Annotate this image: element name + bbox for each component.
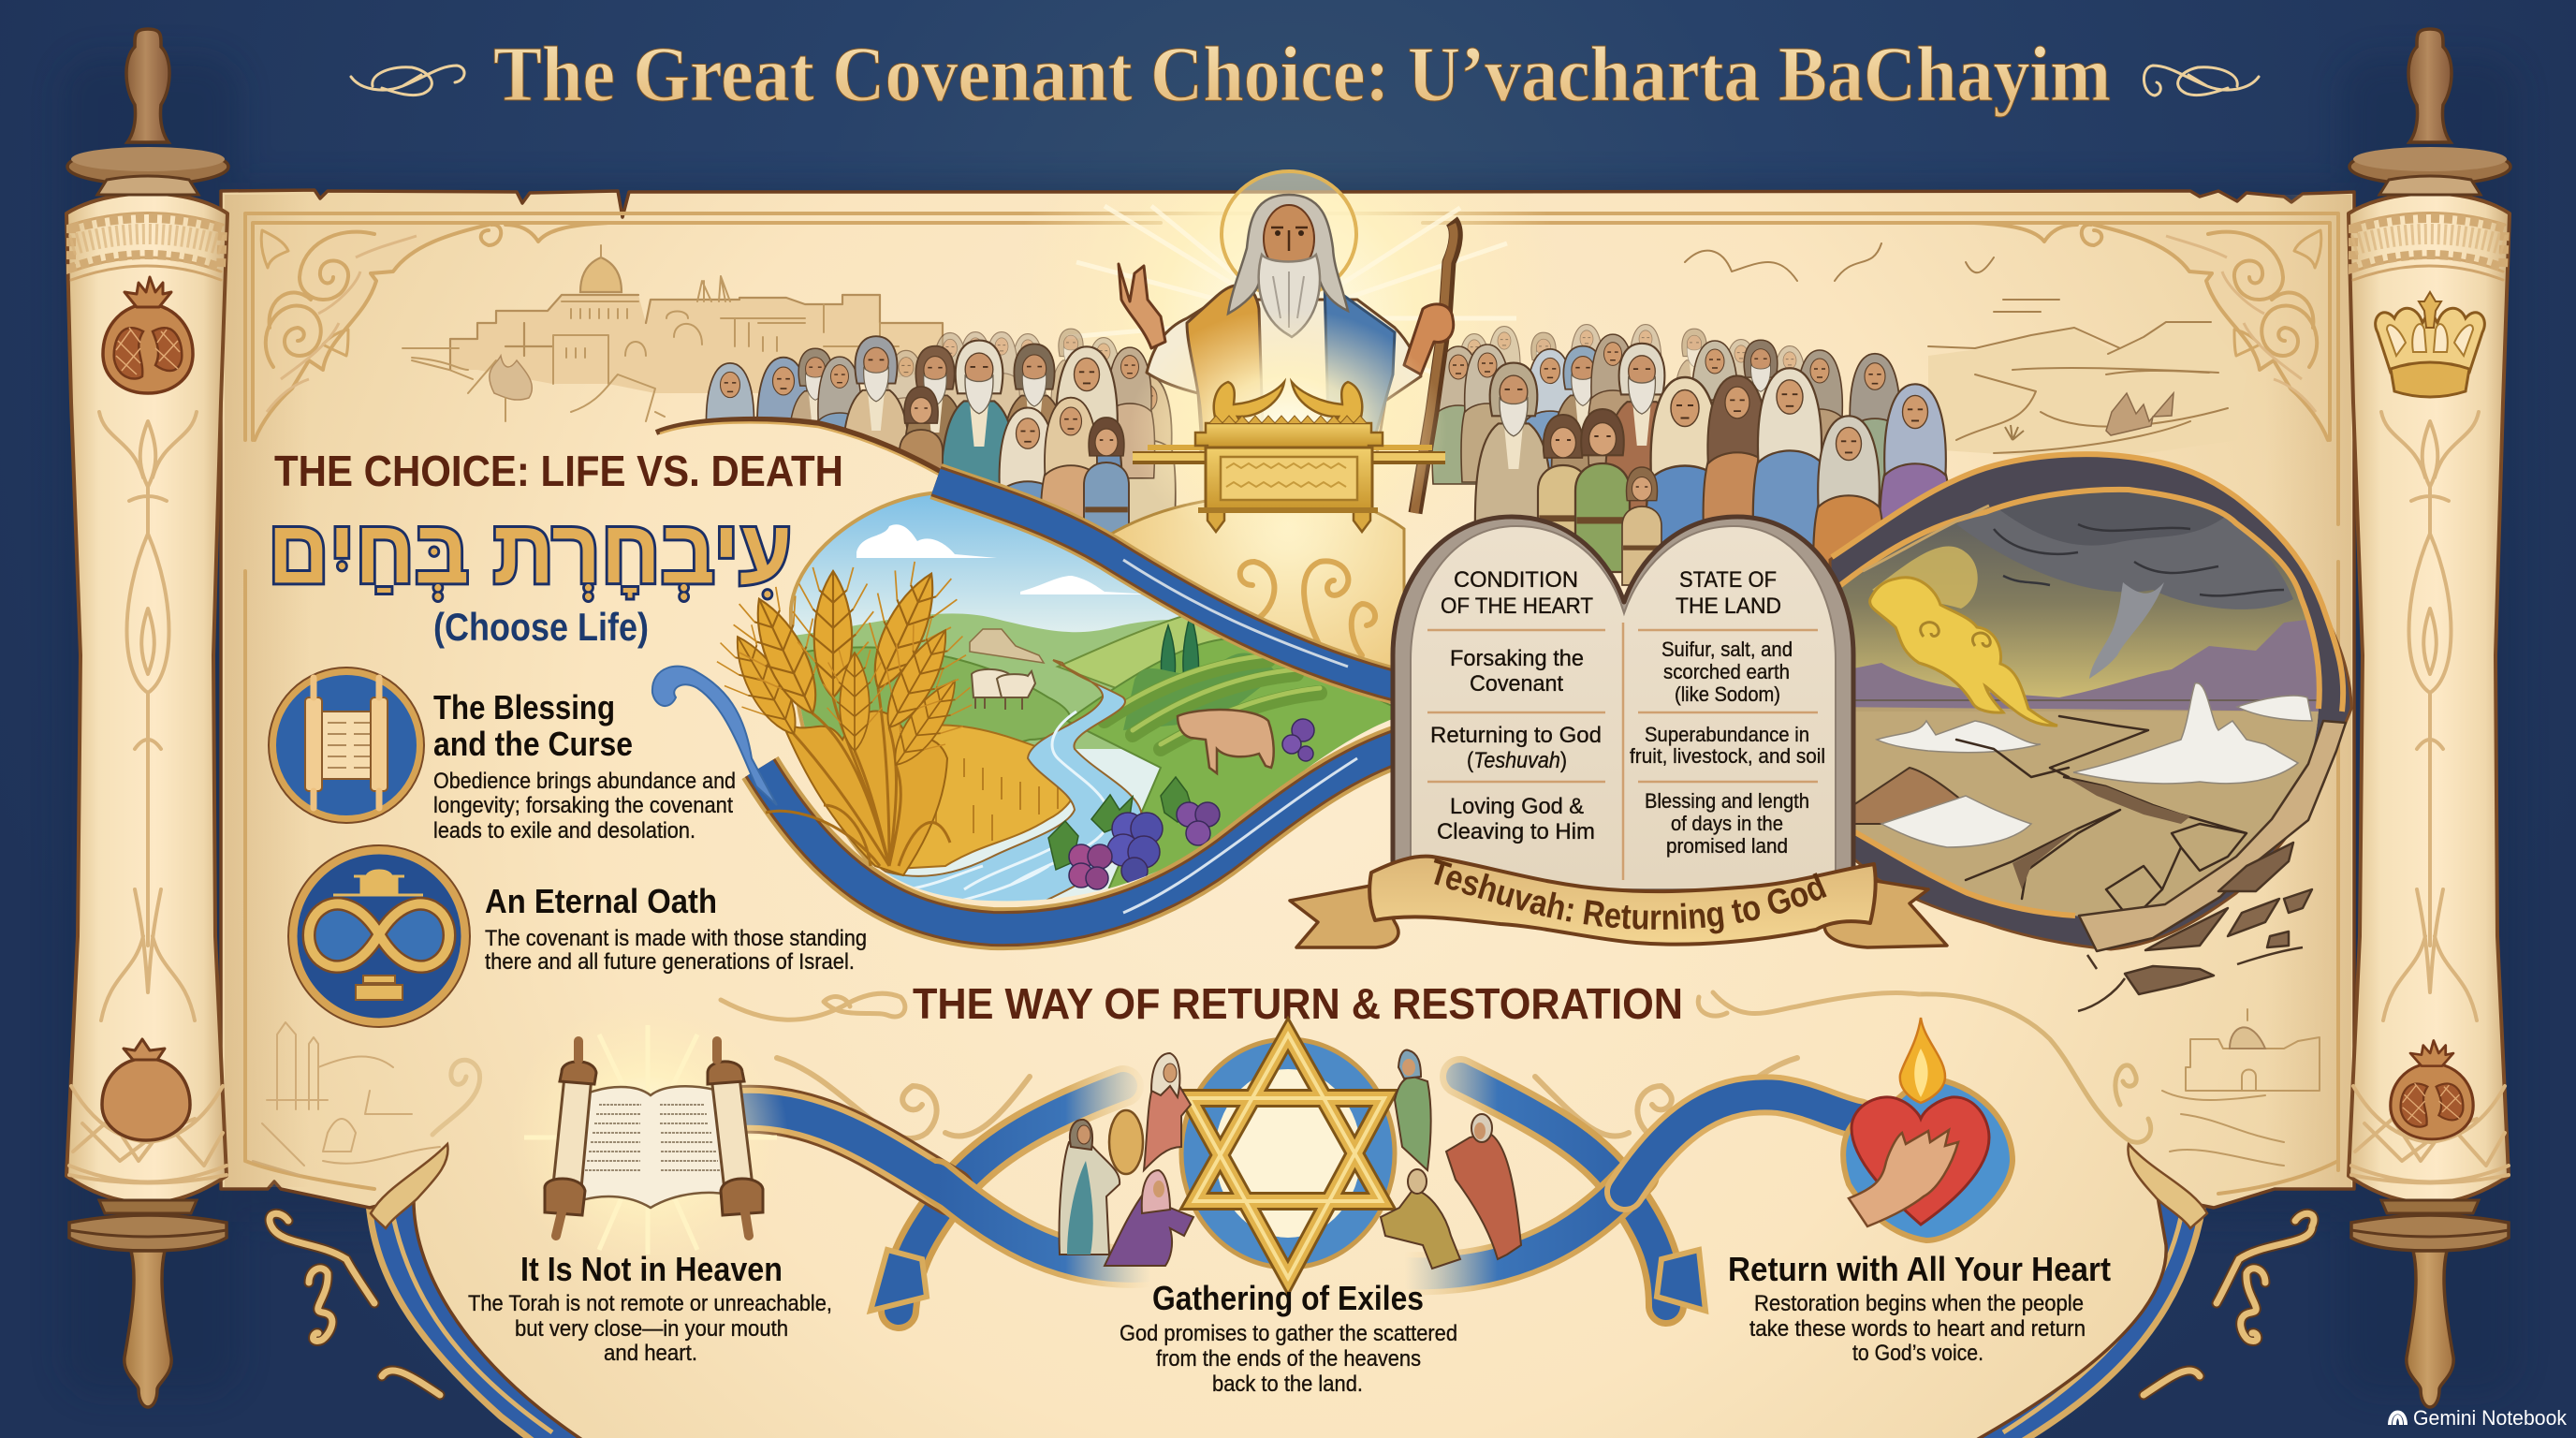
poles [1133, 451, 1445, 464]
face [1264, 205, 1314, 272]
text: the blessing and the curse: The Blessing [433, 688, 615, 726]
row 3 right [1645, 789, 1809, 858]
column header: condition of the heart [1441, 567, 1593, 619]
row 2 right [1630, 723, 1825, 768]
gold mantle [1187, 285, 1264, 459]
row 1 left: Forsaking the [1450, 646, 1584, 671]
row 1 right: scorched earth [1663, 660, 1790, 683]
text: the blessing and the curse [433, 688, 736, 844]
text: the blessing and the curse: longevity; forsaking the covenant [433, 793, 733, 818]
cypress [1161, 621, 1200, 672]
icon: Star of David and gathering figures [1060, 1034, 1521, 1278]
flame [1900, 1018, 1945, 1103]
ring [1830, 454, 2351, 949]
comparison tablets [1393, 517, 1853, 899]
heading: the choice: THE CHOICE: LIFE VS. DEATH [274, 447, 843, 495]
text: return with all your heart [1728, 1250, 2111, 1366]
Hebrew heading: עִיבְחָרְת בְּחַיִם [268, 502, 792, 602]
grapes [1048, 719, 1314, 889]
row 3 left [1437, 794, 1595, 844]
banner: Teshuvah: Teshuvah: Returning to God [1434, 858, 1827, 934]
upper blue band [936, 481, 1404, 688]
cow [1178, 710, 1274, 773]
icon: Torah medallion [269, 668, 424, 823]
diamond ornaments [871, 1250, 1705, 1311]
front row [1475, 363, 1951, 602]
Ark of the Covenant [1129, 309, 1447, 552]
star [1189, 1034, 1384, 1278]
figure: pink [1144, 1053, 1191, 1170]
Gemini Notebook watermark: Gemini Notebook [2413, 1406, 2568, 1430]
text: gathering of exiles: Gathering of Exiles [1152, 1279, 1424, 1317]
text: gathering of exiles: back to the land. [1212, 1372, 1363, 1397]
beard [1259, 255, 1320, 337]
ribbon A right [1404, 1175, 1638, 1273]
icon: heart with flame and hand [1843, 1018, 2012, 1240]
gold caps where the border meets the parchment [371, 1144, 2207, 1228]
sketch: Jerusalem city [402, 245, 943, 421]
row 1 left: Covenant [1470, 671, 1563, 697]
column header: state of the land: THE LAND [1676, 594, 1781, 619]
gold flourish on navy left [270, 1213, 524, 1414]
text: it is not in heaven: and heart. [604, 1341, 697, 1366]
icon: crown [2376, 292, 2484, 397]
ribbon A left [739, 1109, 951, 1192]
middle row [703, 336, 1176, 533]
panel: land of curse [1825, 454, 2351, 1011]
row 1 right [1661, 638, 1793, 706]
filigree under ark [1240, 561, 1375, 655]
frame [1843, 1078, 2012, 1240]
icon: eternal oath medallion [288, 845, 470, 1027]
stone outer [1393, 517, 1853, 899]
table rules [1427, 623, 1818, 880]
text: gathering of exiles: God promises to gather the scattered [1120, 1321, 1457, 1346]
lower parchment blue border [368, 1189, 2205, 1438]
parchment frame and corners [245, 213, 2338, 1194]
golden mound [1108, 494, 1404, 688]
row 3 left: Cleaving to Him [1437, 819, 1595, 844]
panel: land of blessing [652, 481, 1404, 929]
cherubim [1214, 382, 1284, 423]
heart [1852, 1097, 1989, 1225]
crumbling earth [2078, 721, 2346, 1011]
middle row [1432, 334, 1904, 524]
salt mounds [1877, 683, 2312, 847]
column header: state of the land [1676, 567, 1781, 619]
row 2 left: Returning to God [1430, 723, 1602, 748]
lid [1195, 423, 1383, 448]
section flourish left [721, 993, 905, 1020]
mountains [1825, 618, 2331, 712]
Moses figure [1119, 171, 1456, 513]
main parchment [221, 190, 2354, 1438]
subheading: choose life: (Choose Life) [433, 605, 649, 649]
Moses glow and rays [1043, 194, 1533, 374]
dry ground [1825, 712, 2331, 927]
text: return with all your heart: Return with All Your Heart [1728, 1250, 2111, 1288]
parchment edge shading [225, 195, 2351, 1187]
gripping hand [1404, 304, 1454, 374]
icon: wheat sheaf [705, 553, 984, 875]
section flourish right [1698, 992, 1919, 1016]
pages [573, 1086, 744, 1208]
inner rim [1835, 490, 2320, 709]
figure: teal with drum [1060, 1110, 1143, 1255]
back row [1456, 325, 1808, 442]
row 3 right: Blessing and length [1645, 789, 1809, 813]
staff [1415, 221, 1456, 513]
text: an eternal oath: there and all future generations of Israel. [485, 949, 855, 975]
golden field [880, 725, 1071, 871]
text: return with all your heart: Restoration begins when the people [1754, 1291, 2084, 1316]
row 3 right: promised land [1666, 834, 1788, 858]
hair [1228, 195, 1348, 314]
ribbon B right [1460, 1077, 1666, 1306]
column header: state of the land: STATE OF [1679, 567, 1777, 593]
text: it is not in heaven: It Is Not in Heaven [520, 1250, 783, 1288]
back row [886, 329, 1122, 461]
text: gathering of exiles: from the ends of the heavens [1156, 1346, 1421, 1372]
hills [797, 613, 1170, 749]
halo [1222, 171, 1356, 297]
row 1 left [1450, 646, 1584, 697]
figure: green [1395, 1050, 1431, 1170]
blue swirl [652, 667, 777, 805]
text: it is not in heaven: but very close—in your mouth [515, 1316, 788, 1342]
left roller [545, 1041, 596, 1236]
river [880, 659, 1142, 901]
row 3 left: Loving God & [1450, 794, 1584, 819]
text: gathering of exiles [1120, 1279, 1457, 1397]
yellow smoke [1872, 547, 1978, 609]
row 2 left: (Teshuvah) [1467, 748, 1567, 773]
title flourish right [2144, 66, 2259, 95]
heading: the way of return: THE WAY OF RETURN & RESTORATION [913, 979, 1683, 1028]
column header: condition of the heart: OF THE HEART [1441, 594, 1593, 619]
blue medallion [1181, 1039, 1395, 1268]
robe [1147, 300, 1421, 459]
feet [1208, 511, 1370, 532]
lobe artwork [793, 495, 1391, 901]
row 3 right: of days in the [1671, 812, 1783, 835]
village [970, 629, 1044, 663]
figure: purple [1105, 1170, 1193, 1266]
text: it is not in heaven [468, 1250, 832, 1366]
right field [1067, 638, 1404, 899]
right Torah roller [2349, 29, 2510, 1407]
lobe left gold line [791, 492, 941, 866]
cracks [1956, 716, 2247, 913]
lower blue band [760, 744, 1404, 929]
sketch: lower left village [253, 1022, 480, 1175]
left column background patch [646, 419, 973, 674]
row 1 right: Suifur, salt, and [1661, 638, 1793, 661]
text: the blessing and the curse: and the Curse [433, 725, 633, 763]
left Torah roller [66, 29, 228, 1407]
blue mantle [1325, 281, 1395, 459]
hand [1849, 1130, 1958, 1226]
text: it is not in heaven: The Torah is not remote or unreachable, [468, 1291, 832, 1316]
sketch: lower right city [2162, 1009, 2320, 1166]
vineyard rows [1105, 655, 1320, 749]
text: an eternal oath [485, 882, 867, 975]
stone face [1411, 526, 1836, 889]
icon: open Torah scroll [507, 997, 788, 1278]
title heading: The Great Covenant Choice: U’vacharta BaChayim [493, 31, 2111, 118]
people: right crowd [1432, 325, 1951, 602]
text: the blessing and the curse: leads to exile and desolation. [433, 818, 695, 844]
chest [1206, 448, 1372, 511]
text: an eternal oath: The covenant is made with those standing [485, 926, 867, 951]
text: the blessing and the curse: Obedience brings abundance and [433, 769, 736, 794]
text: return with all your heart: take these words to heart and return [1749, 1316, 2086, 1342]
front row [900, 387, 1129, 580]
raised hand [1119, 264, 1165, 348]
row 2 right: Superabundance in [1645, 723, 1809, 746]
gold flourish on navy right [2144, 1213, 2314, 1395]
text: an eternal oath: An Eternal Oath [485, 882, 717, 920]
icon: pomegranate top [103, 277, 193, 393]
figure: yellow [1381, 1169, 1460, 1269]
row 2 left [1430, 723, 1602, 773]
clouds [856, 524, 1151, 594]
ribbon tails [1290, 880, 1947, 947]
scene [1825, 482, 2331, 941]
blue ribbons [739, 1058, 1858, 1311]
scroll filigree [777, 1058, 1797, 1138]
ribbon B left [899, 1086, 1123, 1311]
gold arc above left column [656, 419, 973, 495]
text: return with all your heart: to God’s voice. [1852, 1341, 1983, 1366]
gold arc: lower right [1919, 994, 2151, 1142]
icon: pomegranate bottom [102, 1039, 190, 1140]
people: left crowd [703, 329, 1176, 580]
sheep [972, 669, 1035, 710]
title flourish left [351, 66, 464, 95]
row 1 right: (like Sodom) [1675, 682, 1780, 706]
icon: pomegranate bottom [2391, 1040, 2473, 1139]
storm clouds [1956, 491, 2293, 609]
column header: condition of the heart: CONDITION [1454, 567, 1578, 593]
row 2 right: fruit, livestock, and soil [1630, 744, 1825, 768]
right roller [708, 1041, 763, 1236]
sketch: desert right [1685, 243, 2247, 461]
figure: red [1446, 1114, 1521, 1259]
